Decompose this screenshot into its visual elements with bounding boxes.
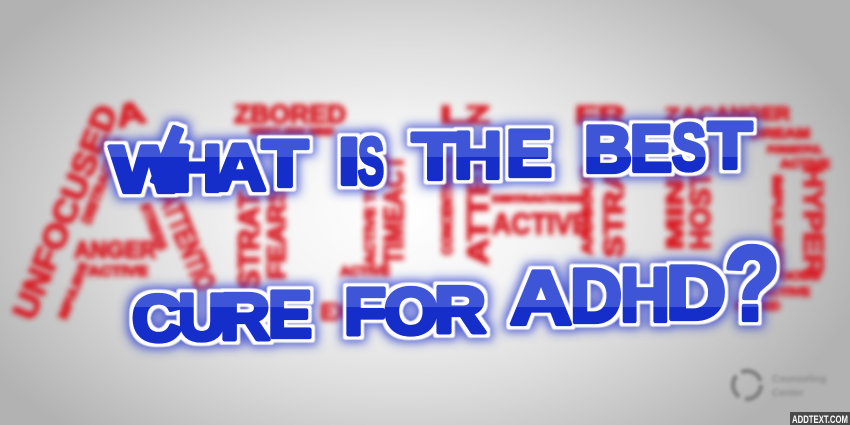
title line 1: T (708, 108, 752, 182)
second letter D words: FOCUS (770, 269, 820, 283)
title line 2: E (268, 277, 312, 351)
letter A words: A (112, 93, 149, 135)
first letter D words: EX (320, 299, 348, 326)
title line 1: S (672, 110, 706, 184)
letter A words: IMPULSIVE (56, 260, 91, 321)
tag background (790, 412, 850, 425)
second letter D words: FORGETFUL (767, 145, 822, 156)
title line 1: W (110, 132, 189, 206)
letter H words: LZ (440, 100, 490, 130)
letter H words: ANXIOUS (579, 165, 596, 255)
second letter D words: MIND (662, 150, 689, 250)
letter A words: UNFOCUSED (5, 99, 125, 325)
title line 1: B (584, 112, 632, 186)
logo ring (733, 371, 761, 399)
second letter D words: BORED (735, 299, 780, 313)
second letter D words: IMPULSIVITY (770, 175, 785, 275)
title line 2: A (510, 256, 572, 341)
letter H words: ACTIVE (492, 208, 590, 241)
second letter D words: ZAC (665, 105, 715, 127)
title line 1 (110, 108, 752, 206)
title line 2: F (344, 274, 386, 348)
first letter D words (233, 99, 409, 326)
letter H words (439, 100, 629, 265)
first letter D words: FEARS (263, 185, 291, 280)
letter H words: DISTRACTIONS (492, 194, 587, 204)
title: What is the best cure for ADHD? (110, 108, 780, 355)
title line 1: S (358, 124, 384, 198)
title line 1: I (338, 124, 360, 198)
blurred ADHD word cloud (5, 93, 830, 326)
title line 1: A (214, 130, 266, 204)
letter A words: ANGER (74, 237, 156, 264)
second letter D words: ACTIVE (780, 157, 830, 171)
first letter D words: TIMEACT (378, 155, 409, 265)
title line 2: H (620, 253, 670, 338)
letter A words: ATTENTIO (152, 186, 221, 296)
title line 2: C (132, 281, 182, 355)
letter H words: ATTEN (462, 145, 495, 265)
first letter D words: ACTIVE TIME (362, 165, 379, 265)
first letter D words: ZBORED (234, 99, 346, 129)
second letter D words (662, 104, 830, 313)
title line 1: E (506, 116, 552, 190)
title line 2: ? (724, 225, 780, 343)
letter A words (5, 93, 221, 325)
title line 2: R (434, 272, 486, 346)
title line 1: T (262, 126, 308, 200)
ADDTEXT.COM tag (790, 412, 850, 425)
title line 1: H (172, 131, 222, 205)
letter A words: ACTIVE (88, 263, 148, 280)
title line 2: D (666, 251, 726, 336)
second letter D words: HYPER (798, 165, 829, 277)
second letter D words: ANGER (715, 104, 790, 124)
letter H words: FR (575, 100, 625, 130)
letter H words: CONCENTRATE (439, 155, 456, 255)
second letter D words: ACTIVE (760, 285, 810, 299)
blurred logo watermark: Center (772, 388, 804, 399)
letter A words: DISTRACTED (78, 137, 126, 226)
title line 2: U (178, 280, 226, 354)
first letter D words: ACTIVE (340, 263, 390, 279)
letter H words: STRAT (598, 148, 629, 258)
blurred logo watermark (733, 371, 826, 399)
title line 1: H (454, 118, 502, 192)
title line 2: D (570, 254, 622, 339)
second letter D words: HOSTIL (685, 145, 717, 250)
title line 2 (132, 225, 780, 355)
first letter D words: STRAT (233, 190, 266, 290)
second letter D words: DREAM (750, 125, 810, 141)
title line 2: O (384, 274, 438, 348)
logo text: Counseling (772, 374, 826, 385)
letter A words: STRESS (137, 200, 171, 252)
title line 2: R (220, 279, 270, 353)
title line 1: E (630, 111, 672, 185)
W slash stroke (152, 127, 182, 184)
first letter D words: RESTLESS MIND (250, 127, 335, 138)
title line 1: T (412, 119, 458, 193)
